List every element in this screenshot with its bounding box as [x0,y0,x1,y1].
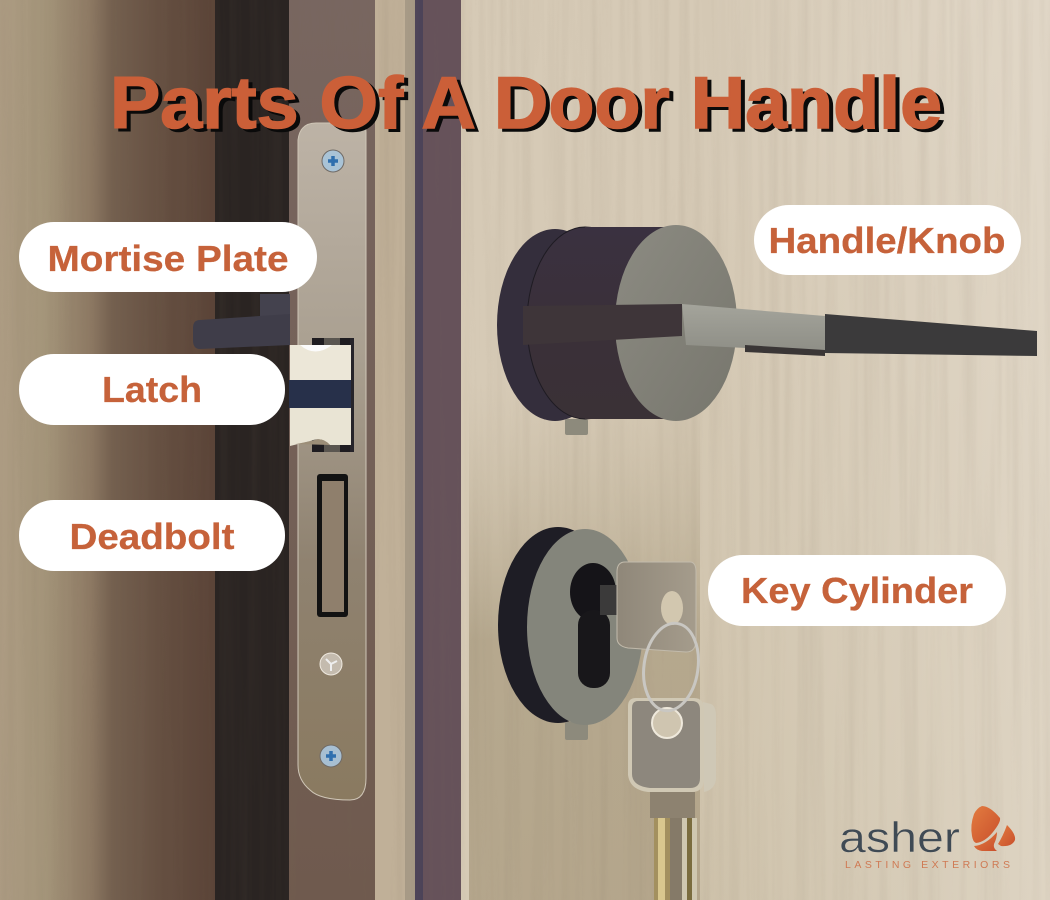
label: Deadbolt: Deadbolt [70,516,234,557]
logo wordmark: asher [839,814,960,862]
label: Handle/Knob [754,205,1021,275]
label: Handle/Knob: Handle/Knob [768,220,1006,261]
logo tagline: LASTING EXTERIORS [845,859,1010,871]
key ring [638,620,704,714]
mortise plate [289,123,366,800]
lever grip [825,314,1037,356]
label: Deadbolt [19,500,285,571]
screw: middle [320,653,342,675]
label: Key Cylinder [708,555,1006,626]
key cylinder [498,527,716,900]
screw under handle [565,419,588,435]
title: Parts Of A Door Handle [114,66,946,147]
screw: bottom [320,745,342,767]
label: Latch [19,354,285,425]
keyhole [570,563,620,688]
key one [617,562,696,652]
deadbolt slot [317,474,348,617]
latch bolt [289,338,354,452]
label: Latch: Latch [102,369,202,410]
label: Mortise Plate [19,222,317,292]
door handle [497,225,1037,435]
rear lever behind the door edge [193,294,290,349]
logo: asher [839,806,1015,871]
key two [628,698,716,900]
label: Mortise Plate: Mortise Plate [48,238,288,279]
screw: top [322,150,344,172]
title: Parts Of A Door Handle [110,63,942,144]
label: Key Cylinder: Key Cylinder [741,570,973,611]
logo mark [971,806,1015,851]
